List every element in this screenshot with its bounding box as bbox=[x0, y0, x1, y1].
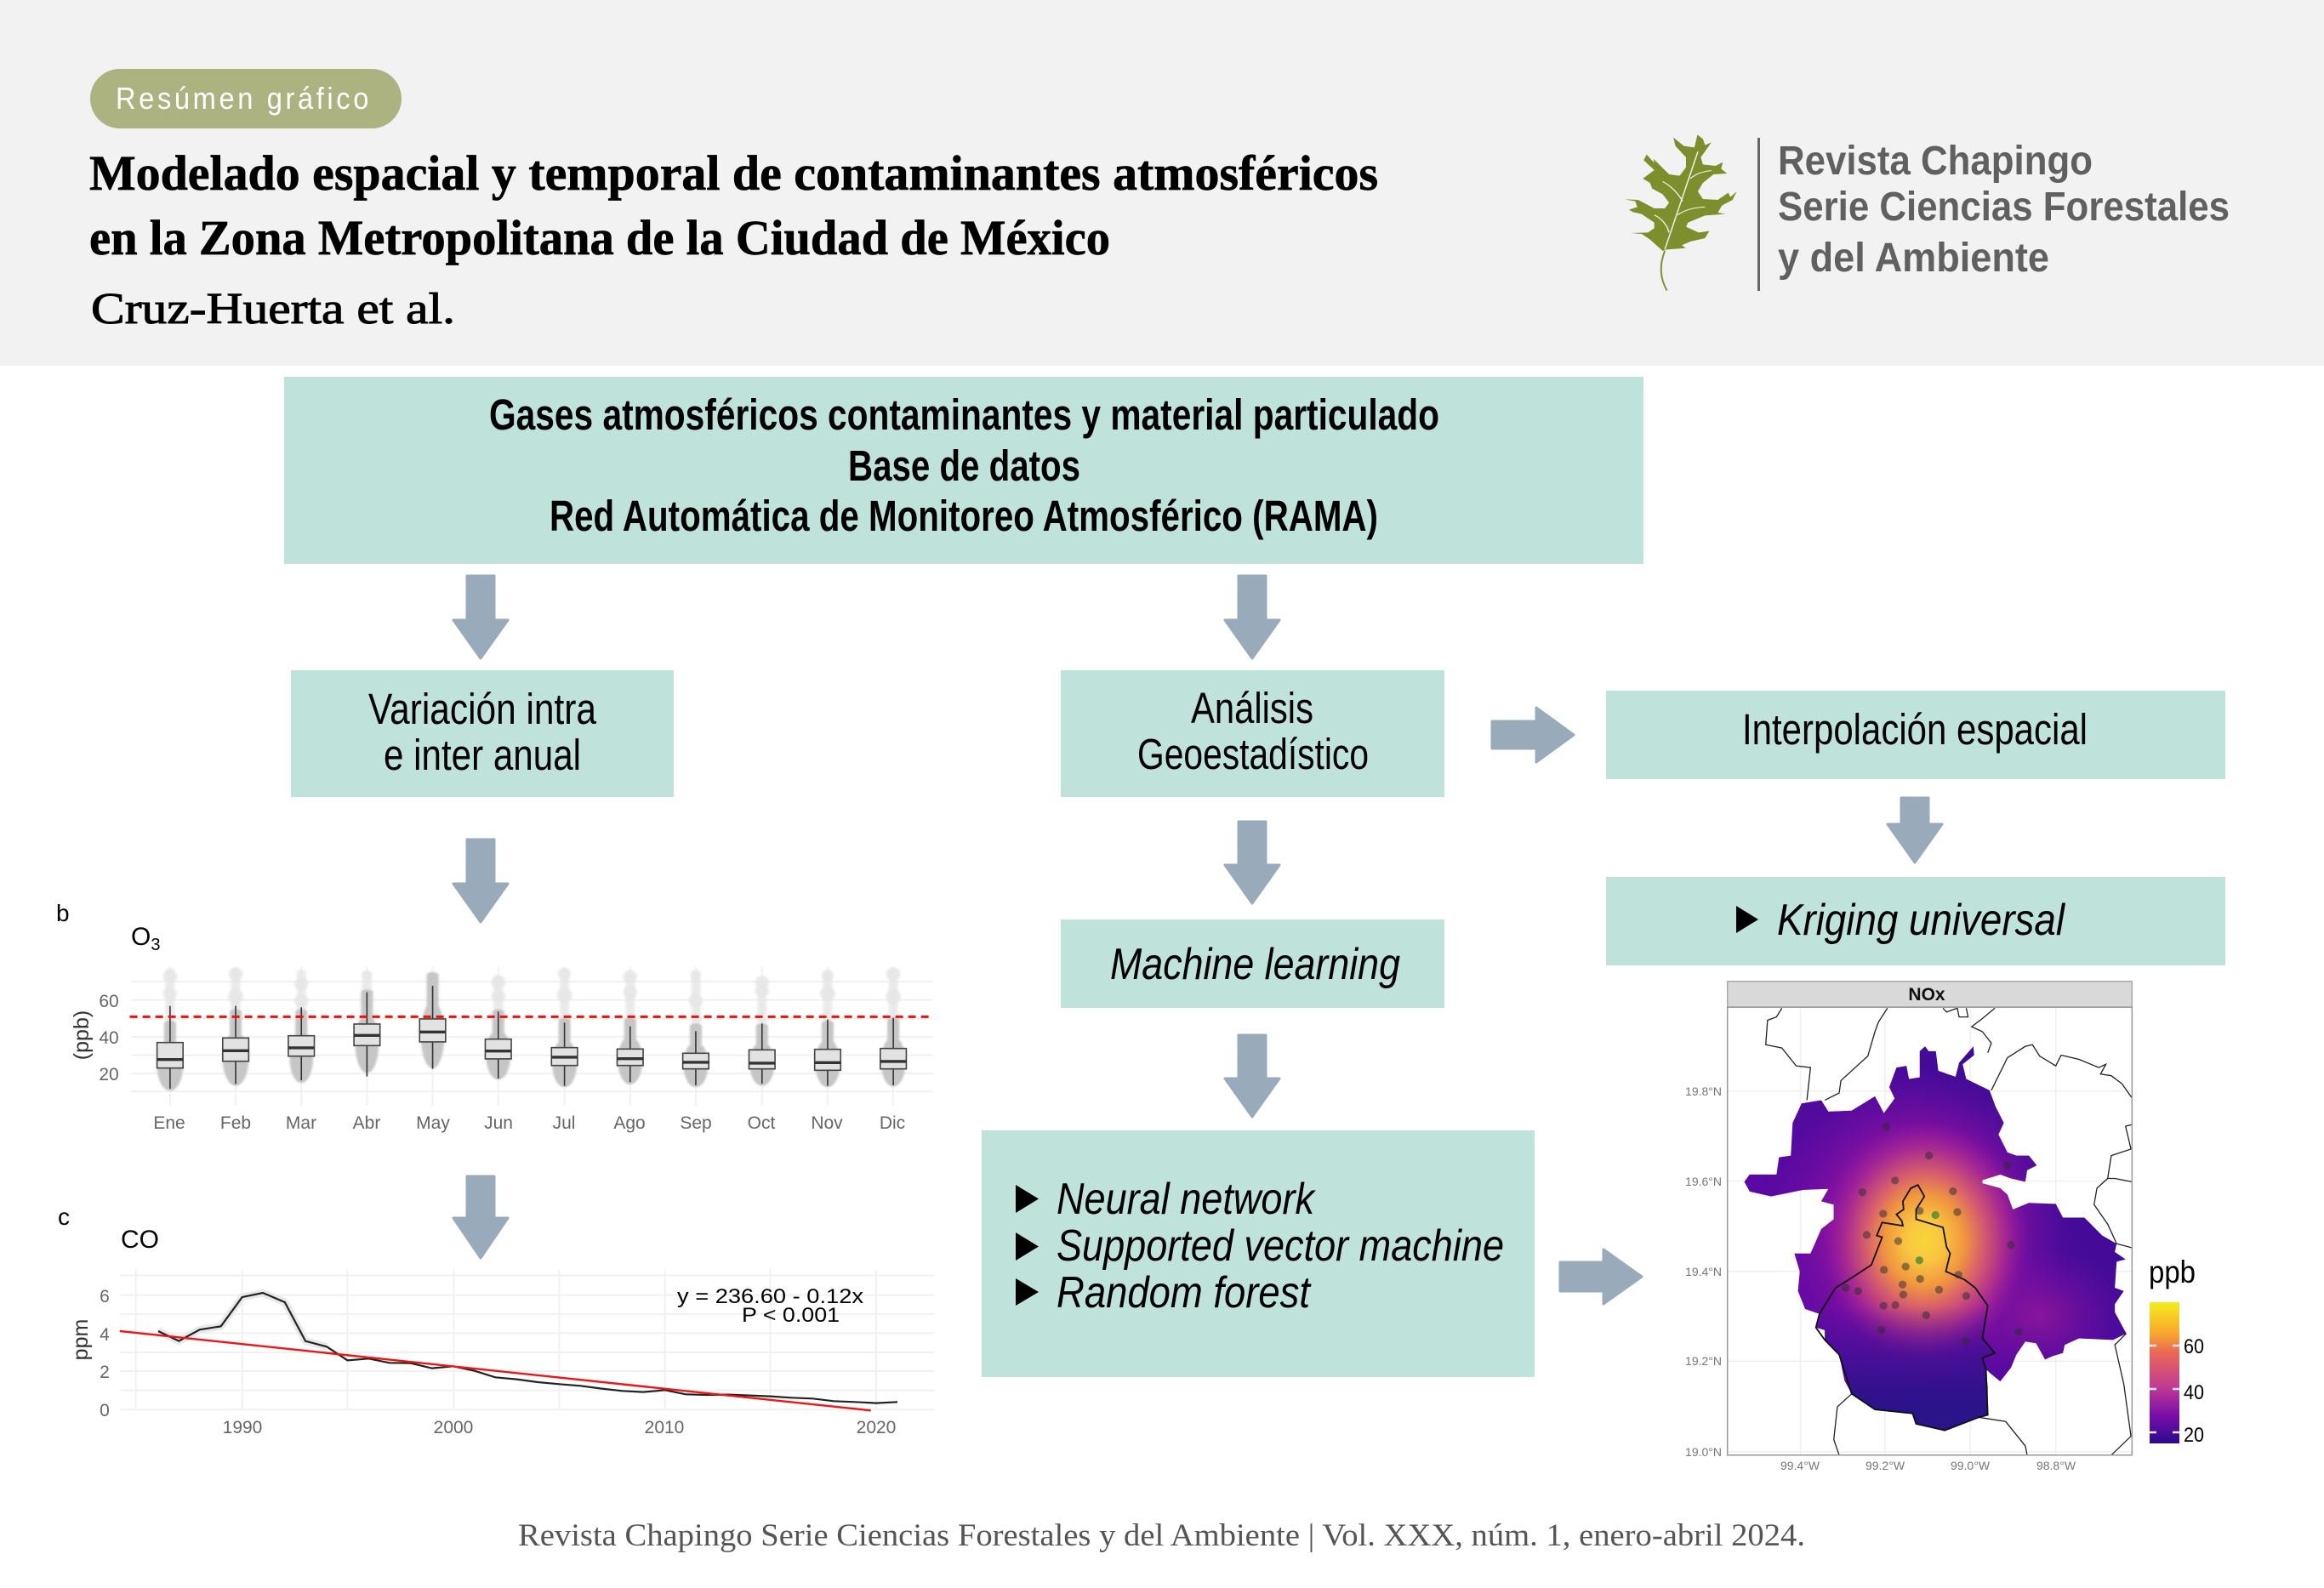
neighbouring boundaries bbox=[1766, 1008, 2132, 1455]
panel: variación intra e inter anual bbox=[291, 670, 674, 797]
regression equation: y = 236.60 - 0.12x bbox=[677, 1285, 863, 1308]
map: NOx spatial interpolation: 19.2°N bbox=[1685, 1354, 1722, 1368]
map: NOx spatial interpolation bbox=[1685, 982, 2204, 1472]
map: NOx spatial interpolation: 98.8°W bbox=[2036, 1459, 2076, 1472]
panel: machine learning: Machine learning bbox=[1110, 940, 1400, 989]
chart: O3 monthly box plots: Mar bbox=[286, 1113, 316, 1133]
chart: CO annual trend: 4 bbox=[100, 1325, 110, 1345]
chart: O3 monthly box plots: Oct bbox=[748, 1113, 775, 1133]
chart: O3 monthly box plots: Jul bbox=[553, 1113, 575, 1133]
chart: CO annual trend: 2010 bbox=[645, 1418, 684, 1437]
logo: journal bbox=[1625, 134, 2230, 291]
logo: journal: Revista Chapingo bbox=[1778, 139, 2093, 184]
map legend: ppb: 40 bbox=[2184, 1381, 2204, 1404]
chart: O3 monthly box plots: 60 bbox=[99, 992, 119, 1011]
chart: O3 monthly box plots: Ene bbox=[153, 1113, 185, 1133]
chart: O3 monthly box plots: Abr bbox=[353, 1113, 380, 1133]
chart: O3 monthly box plots: 3 bbox=[151, 936, 160, 954]
chart: O3 monthly box plots: 40 bbox=[99, 1028, 119, 1048]
chart: O3 monthly box plots: Nov bbox=[811, 1113, 843, 1133]
chart: O3 monthly box plots: Feb bbox=[220, 1113, 251, 1133]
panel: análisis geoestadístico bbox=[1061, 670, 1444, 797]
panel: data source: Red Automática de Monitoreo Atmosférico (RAMA) bbox=[550, 492, 1378, 540]
chart: O3 monthly box plots: O bbox=[131, 923, 151, 951]
arrow: machine learning to methods bbox=[1225, 1035, 1279, 1117]
map: NOx spatial interpolation: 19.8°N bbox=[1685, 1084, 1722, 1098]
panel: data source bbox=[284, 377, 1643, 564]
arrow: ozone chart to CO chart bbox=[453, 1176, 508, 1258]
panel: variación intra e inter anual: Variación intra bbox=[368, 685, 597, 733]
tag: Resúmen gráfico: Resúmen gráfico bbox=[116, 81, 372, 116]
icon: bullet triangle 2 bbox=[1016, 1232, 1039, 1261]
icon: oak leaf bbox=[1625, 134, 1737, 291]
map: NOx spatial interpolation: NOx bbox=[1908, 985, 1945, 1005]
panel: machine learning methods: Supported vector machine bbox=[1057, 1221, 1504, 1271]
map: NOx spatial interpolation: 99.2°W bbox=[1865, 1459, 1905, 1472]
chart: CO annual trend: 2000 bbox=[434, 1418, 473, 1437]
map: NOx spatial interpolation: 99.4°W bbox=[1780, 1459, 1820, 1472]
map frame bbox=[1728, 1007, 2132, 1455]
arrow: methods to map bbox=[1560, 1249, 1642, 1304]
icon: bullet triangle 1 bbox=[1016, 1185, 1039, 1213]
chart: CO annual trend: ppm bbox=[69, 1319, 93, 1360]
map: NOx spatial interpolation: 19.4°N bbox=[1685, 1265, 1722, 1278]
title bbox=[89, 145, 1378, 265]
tag: Resúmen gráfico bbox=[90, 69, 402, 128]
chart: CO annual trend bbox=[58, 1204, 934, 1437]
chart: O3 monthly box plots: Ago bbox=[613, 1113, 646, 1133]
footer citation: Revista Chapingo Serie Ciencias Forestales y del Ambiente | Vol. XXX, núm. 1, enero-abril 2024. bbox=[518, 1518, 1805, 1553]
CDMX outline bbox=[1816, 1185, 1995, 1431]
chart: CO annual trend: 0 bbox=[100, 1401, 110, 1420]
chart: CO annual trend: 6 bbox=[100, 1287, 110, 1306]
panel: kriging universal: Kriging universal bbox=[1777, 896, 2065, 945]
panel: interpolación espacial: Interpolación espacial bbox=[1742, 705, 2088, 754]
chart: O3 monthly box plots: Jun bbox=[484, 1113, 513, 1133]
logo: journal: y del Ambiente bbox=[1778, 236, 2049, 281]
panel: machine learning methods bbox=[982, 1130, 1535, 1377]
regression equation bbox=[677, 1285, 863, 1327]
map legend: ppb: 60 bbox=[2184, 1335, 2204, 1358]
chart: O3 monthly box plots: Dic bbox=[880, 1113, 905, 1133]
arrow: interpolation to kriging bbox=[1888, 798, 1942, 862]
panel: kriging universal bbox=[1606, 877, 2225, 965]
logo: journal: Serie Ciencias Forestales bbox=[1778, 185, 2230, 230]
arrow: source to geostatistics bbox=[1225, 576, 1279, 658]
arrow: source to variation bbox=[453, 576, 508, 658]
chart: CO annual trend: c bbox=[58, 1204, 70, 1230]
panel: machine learning bbox=[1061, 919, 1444, 1008]
monitoring stations bbox=[1842, 1123, 2023, 1346]
chart: O3 monthly box plots: 20 bbox=[99, 1065, 119, 1084]
panel: machine learning methods: Random forest bbox=[1057, 1268, 1312, 1318]
chart: CO annual trend: 2 bbox=[100, 1363, 110, 1382]
icon: bullet triangle 3 bbox=[1016, 1278, 1039, 1306]
map: NOx spatial interpolation: 19.6°N bbox=[1685, 1175, 1722, 1188]
map legend: ppb bbox=[2149, 1255, 2204, 1447]
panel: data source: Base de datos bbox=[848, 441, 1080, 490]
title: Modelado espacial y temporal de contaminantes atmosféricos bbox=[89, 145, 1378, 201]
chart: O3 monthly box plots bbox=[56, 900, 933, 1133]
map legend: ppb: 20 bbox=[2184, 1424, 2204, 1447]
header band bbox=[0, 0, 2324, 366]
title: en la Zona Metropolitana de la Ciudad de México bbox=[89, 210, 1110, 265]
chart: CO annual trend: 2020 bbox=[857, 1418, 896, 1437]
arrow: geostatistics to machine learning bbox=[1225, 822, 1279, 903]
map header strip bbox=[1728, 982, 2132, 1007]
chart: CO annual trend: 1990 bbox=[223, 1418, 262, 1437]
heat surface bbox=[1744, 1046, 2127, 1430]
chart: O3 monthly box plots: b bbox=[56, 900, 70, 926]
map legend: ppb: ppb bbox=[2149, 1255, 2196, 1289]
map: NOx spatial interpolation: 99.0°W bbox=[1951, 1459, 1991, 1472]
chart: O3 monthly box plots: May bbox=[416, 1113, 450, 1133]
icon: bullet triangle bbox=[1736, 906, 1758, 933]
arrow: variation to ozone chart bbox=[453, 840, 508, 922]
panel: machine learning methods: Neural network bbox=[1057, 1175, 1317, 1224]
chart: O3 monthly box plots: Sep bbox=[680, 1113, 712, 1133]
map: NOx spatial interpolation: 19.0°N bbox=[1685, 1445, 1722, 1459]
panel: variación intra e inter anual: e inter anual bbox=[384, 731, 581, 779]
panel: interpolación espacial bbox=[1606, 691, 2225, 779]
panel: análisis geoestadístico: Geoestadístico bbox=[1137, 730, 1369, 778]
regression equation: P < 0.001 bbox=[742, 1304, 840, 1327]
panel: análisis geoestadístico: Análisis bbox=[1191, 684, 1313, 732]
authors: Cruz-Huerta et al. bbox=[91, 285, 455, 333]
chart: CO annual trend: CO bbox=[121, 1226, 159, 1254]
arrow: geostatistics to interpolation bbox=[1492, 708, 1574, 762]
chart: O3 monthly box plots: (ppb) bbox=[70, 1010, 94, 1060]
panel: data source: Gases atmosféricos contaminantes y material particulado bbox=[489, 390, 1439, 439]
